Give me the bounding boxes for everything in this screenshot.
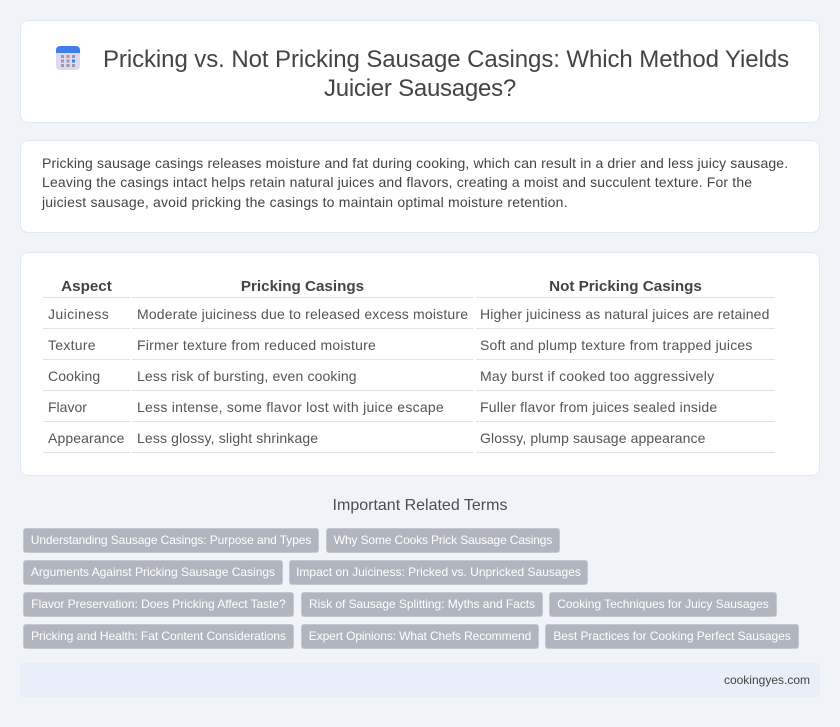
tag: Risk of Sausage Splitting: Myths and Facts [309, 597, 535, 611]
tag: Impact on Juiciness: Pricked vs. Unpricked Sausages [296, 565, 581, 579]
tag [301, 624, 539, 649]
table header row [61, 278, 702, 295]
tag: Flavor Preservation: Does Pricking Affect Taste? [31, 597, 286, 611]
table row: cooking: May burst if cooked too aggressively [480, 368, 714, 384]
tag: Why Some Cooks Prick Sausage Casings [334, 533, 552, 547]
table row: cooking: Less risk of bursting, even cooking [137, 368, 357, 384]
text block: summary: Leaving the casings intact helps retain natural juices and flavors, creating a moist and succulent texture. For the [42, 174, 752, 190]
table row: flavor [48, 399, 717, 415]
table header row: Not Pricking Casings [549, 278, 702, 295]
footer band [20, 663, 820, 697]
table row: cooking [48, 368, 714, 384]
tag: Arguments Against Pricking Sausage Casings [31, 565, 275, 579]
tag [545, 624, 799, 649]
table row: flavor: Flavor [48, 399, 87, 415]
table row: appearance: Less glossy, slight shrinkage [137, 430, 318, 446]
footer source text: cookingyes.com [724, 673, 810, 687]
panel: title header [20, 20, 820, 123]
text block: summary: juiciest sausage, avoid pricking the casings to maintain optimal moisture retention. [42, 194, 568, 210]
table row: texture: Firmer texture from reduced moisture [137, 337, 376, 353]
heading: related terms: Important Related Terms [333, 497, 507, 514]
icon: calendar [56, 46, 80, 70]
tag [23, 560, 283, 585]
tag [326, 528, 560, 553]
tag [23, 624, 294, 649]
table row: cooking: Cooking [48, 368, 100, 384]
tag [289, 560, 588, 585]
table row: flavor: Less intense, some flavor lost with juice escape [137, 399, 444, 415]
tag list: related terms [23, 528, 799, 649]
table row: flavor: Fuller flavor from juices sealed inside [480, 399, 717, 415]
tag: Expert Opinions: What Chefs Recommend [309, 629, 531, 643]
table row: juiciness: Higher juiciness as natural juices are retained [480, 306, 770, 322]
table row: appearance [48, 430, 706, 446]
table row: juiciness: Juiciness [48, 306, 109, 322]
tag [549, 592, 777, 617]
tag: Understanding Sausage Casings: Purpose and Types [31, 533, 311, 547]
table row: texture: Soft and plump texture from trapped juices [480, 337, 753, 353]
table row: appearance: Appearance [48, 430, 125, 446]
table row: juiciness: Moderate juiciness due to released excess moisture [137, 306, 468, 322]
table row: texture: Texture [48, 337, 96, 353]
text block: summary: Pricking sausage casings releases moisture and fat during cooking, which can result in a drier and less juicy sausage. [42, 155, 788, 171]
tag [23, 528, 319, 553]
tag [23, 592, 294, 617]
panel: comparison table [20, 252, 820, 476]
table row: texture [48, 337, 753, 353]
title: Juicier Sausages? [324, 75, 516, 102]
table header row: Aspect [61, 278, 112, 295]
tag: Pricking and Health: Fat Content Considerations [31, 629, 286, 643]
table row: juiciness [48, 306, 770, 322]
table row: appearance: Glossy, plump sausage appearance [480, 430, 706, 446]
title: Pricking vs. Not Pricking Sausage Casings: Which Method Yields [103, 46, 789, 73]
title [103, 46, 789, 102]
tag [301, 592, 543, 617]
tag: Best Practices for Cooking Perfect Sausages [553, 629, 791, 643]
tag: Cooking Techniques for Juicy Sausages [557, 597, 769, 611]
panel: intro text [20, 140, 820, 233]
text block: summary [42, 155, 788, 210]
table header row: Pricking Casings [241, 278, 364, 295]
